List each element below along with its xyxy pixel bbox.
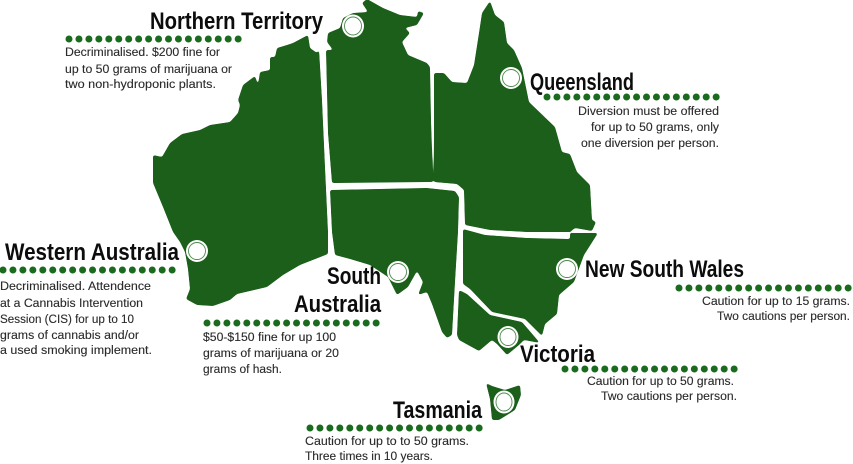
heading: Australia: [294, 291, 382, 318]
dotted rule: [69, 36, 239, 42]
state: Victoria: [457, 290, 540, 355]
callout: Western Australia: [0, 239, 180, 357]
description: Caution for up to to 50 grams.: [305, 434, 469, 448]
description: grams of cannabis and/or: [0, 328, 139, 342]
dotted rule: [310, 424, 480, 432]
description: a used smoking implement.: [0, 343, 152, 357]
heading: Western Australia: [5, 239, 180, 266]
callout: Tasmania: [305, 397, 483, 463]
dotted rule: [565, 366, 735, 372]
description: $50-$150 fine for up 100: [203, 330, 336, 344]
heading: Northern Territory: [150, 8, 324, 35]
heading: Victoria: [520, 341, 596, 368]
heading: South: [327, 263, 381, 290]
state: South Australia: [330, 188, 459, 338]
marker: Northern Territory: [342, 14, 364, 38]
dotted rule: [207, 320, 378, 326]
description: Decriminalised. Attendence: [0, 279, 151, 293]
description: Diversion must be offered: [578, 104, 719, 118]
description: grams of marijuana or 20: [203, 346, 339, 360]
description: two non-hydroponic plants.: [65, 77, 216, 91]
heading: Tasmania: [393, 397, 483, 424]
marker: Western Australia: [186, 240, 208, 262]
marker: Victoria: [498, 326, 518, 348]
description: Decriminalised. $200 fine for: [65, 45, 220, 59]
description: Two cautions per person.: [601, 389, 737, 403]
dotted rule: [547, 94, 717, 100]
state: New South Wales: [463, 229, 598, 336]
dotted rule: [3, 266, 173, 274]
description: Two cautions per person.: [717, 309, 850, 323]
description: Three times in 10 years.: [305, 449, 433, 463]
callout: Victoria: [520, 341, 737, 403]
dotted rule: [679, 284, 849, 292]
marker: New South Wales: [556, 258, 578, 280]
description: grams of hash.: [203, 362, 282, 376]
callout: Northern Territory: [65, 8, 324, 91]
description: for up to 50 grams, only: [591, 120, 720, 134]
description: Caution for up to 15 grams.: [702, 294, 850, 308]
map of Australia: [153, 0, 598, 420]
description: one diversion per person.: [581, 136, 719, 150]
state: Tasmania: [486, 383, 521, 420]
state: Western Australia: [153, 35, 328, 306]
description: up to 50 grams of marijuana or: [65, 62, 232, 76]
heading: Queensland: [530, 69, 634, 96]
callout: South Australia: [203, 263, 382, 376]
marker: Tasmania: [494, 390, 514, 414]
state: Northern Territory: [326, 0, 433, 183]
state: Queensland: [434, 1, 596, 232]
description: at a Cannabis Intervention: [0, 296, 143, 310]
description: Caution for up to 50 grams.: [587, 374, 734, 388]
callout: Queensland: [530, 69, 720, 150]
description: Session (CIS) for up to 10: [0, 312, 134, 326]
marker: South Australia: [387, 261, 409, 283]
marker: Queensland: [500, 67, 522, 89]
heading: New South Wales: [585, 256, 744, 283]
callout: New South Wales: [585, 256, 850, 323]
